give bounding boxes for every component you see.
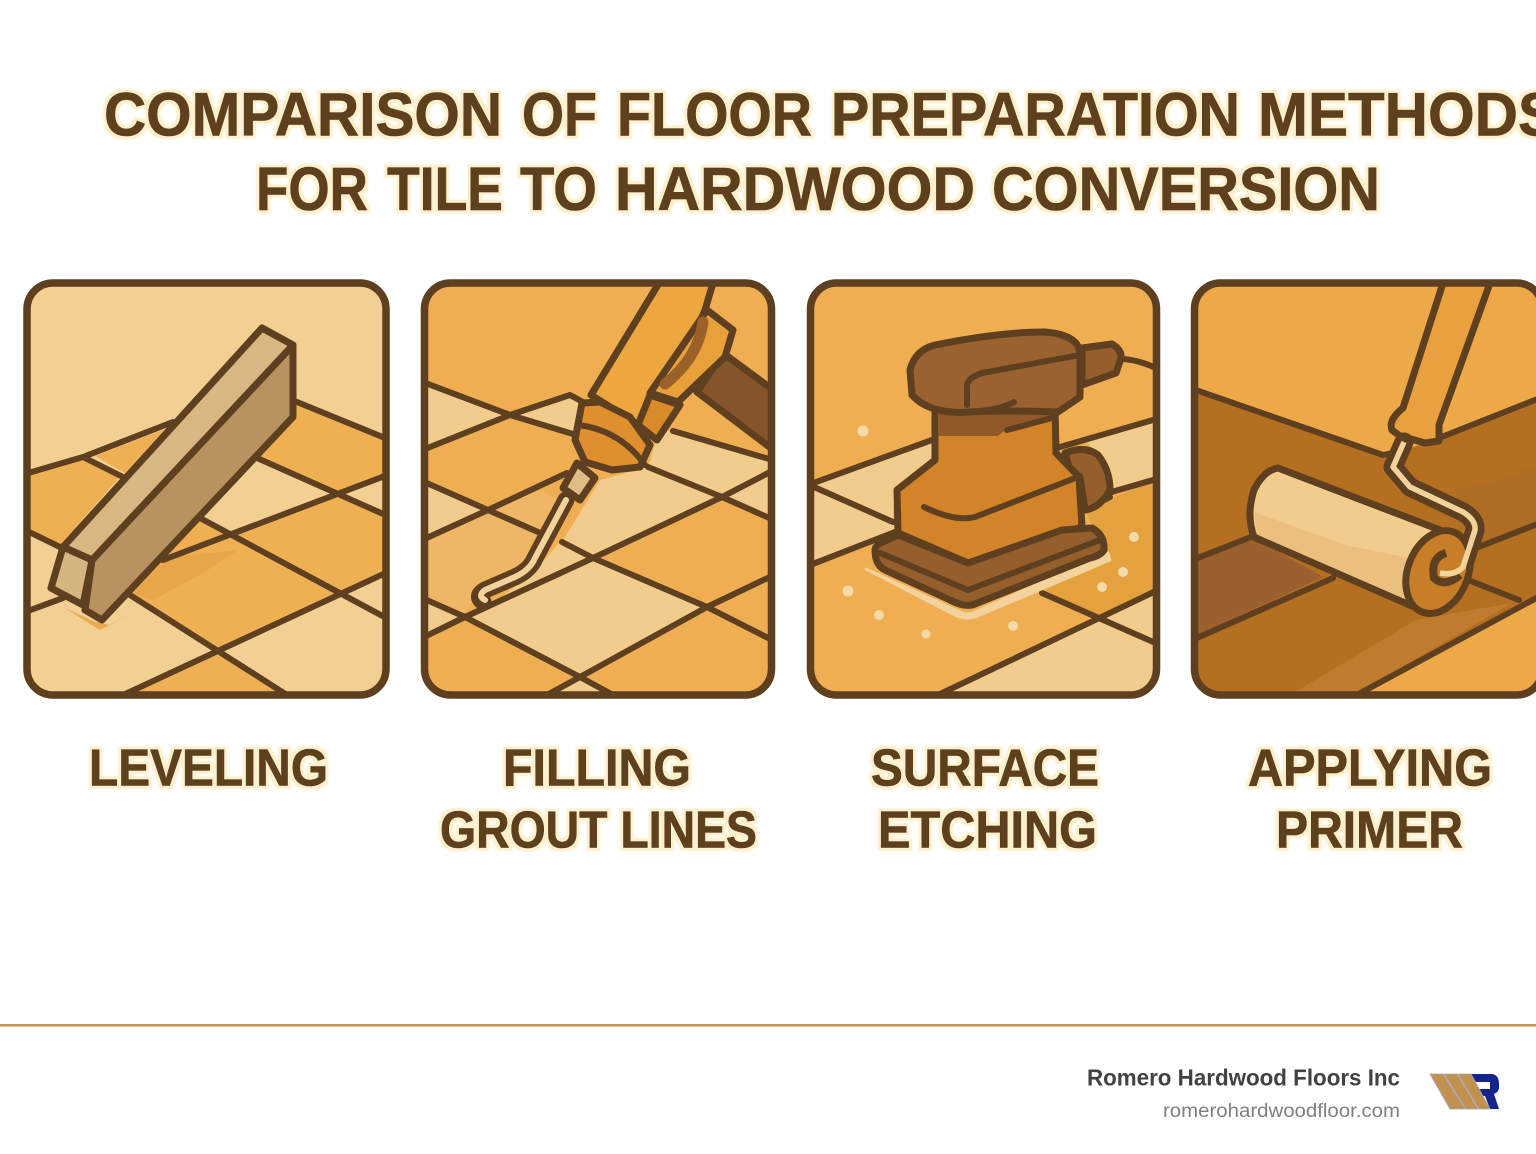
- title: TILE: [387, 155, 503, 223]
- title: COMPARISON: [104, 80, 502, 148]
- icon: caulk gun: [479, 283, 733, 602]
- grout lines: [805, 359, 1160, 695]
- title: FLOOR: [617, 80, 812, 148]
- panel: filling grout lines: [420, 275, 780, 705]
- panel: applying primer: [1190, 275, 1536, 705]
- panel: leveling: [20, 275, 395, 705]
- floor tiles: [420, 381, 776, 695]
- label: applying primer: PRIMER: [1276, 802, 1463, 860]
- sander body: [897, 405, 1082, 563]
- website: romerohardwoodfloor.com: [1163, 1101, 1400, 1122]
- floor tiles: [805, 418, 1160, 695]
- label: applying primer: APPLYING: [1248, 740, 1492, 798]
- title: TO: [520, 155, 597, 223]
- grout lines: [25, 402, 390, 695]
- panel: surface etching: [805, 275, 1165, 705]
- sander plug: [1082, 344, 1121, 385]
- icon: orbital sander: [866, 332, 1121, 618]
- label: surface etching: ETCHING: [878, 802, 1097, 860]
- icon: wooden straightedge: [51, 328, 293, 620]
- grout lines: [420, 381, 776, 695]
- label: leveling: LEVELING: [89, 740, 328, 798]
- footer branding: [1087, 1064, 1499, 1122]
- floor tiles: [25, 400, 390, 695]
- label: filling grout lines: [440, 740, 757, 860]
- label: surface etching: [871, 740, 1099, 860]
- title: CONVERSION: [992, 155, 1380, 223]
- label: applying primer: [1248, 740, 1492, 860]
- floor tiles: [1190, 388, 1536, 700]
- icon: company logo: [1430, 1074, 1499, 1109]
- dust particles: [842, 426, 1139, 638]
- dark rear handle: [694, 354, 768, 450]
- title: PREPARATION: [831, 80, 1240, 148]
- sander handle: [910, 332, 1080, 412]
- sander side knob: [1065, 449, 1110, 510]
- board shadow: [133, 550, 238, 600]
- company name: Romero Hardwood Floors Inc: [1087, 1064, 1400, 1090]
- label: filling grout lines: GROUT LINES: [440, 802, 757, 860]
- grout lines: [1190, 388, 1536, 697]
- labels: [89, 740, 1492, 860]
- label: filling grout lines: FILLING: [503, 740, 691, 798]
- title: OF: [522, 80, 597, 148]
- footer rule: [0, 1024, 1536, 1026]
- title: HARDWOOD: [615, 155, 975, 223]
- sander base: [875, 528, 1104, 605]
- sanding halo: [866, 553, 1110, 618]
- title: FOR: [256, 155, 368, 223]
- icon: paint roller: [1250, 283, 1490, 623]
- label: surface etching: SURFACE: [871, 740, 1099, 798]
